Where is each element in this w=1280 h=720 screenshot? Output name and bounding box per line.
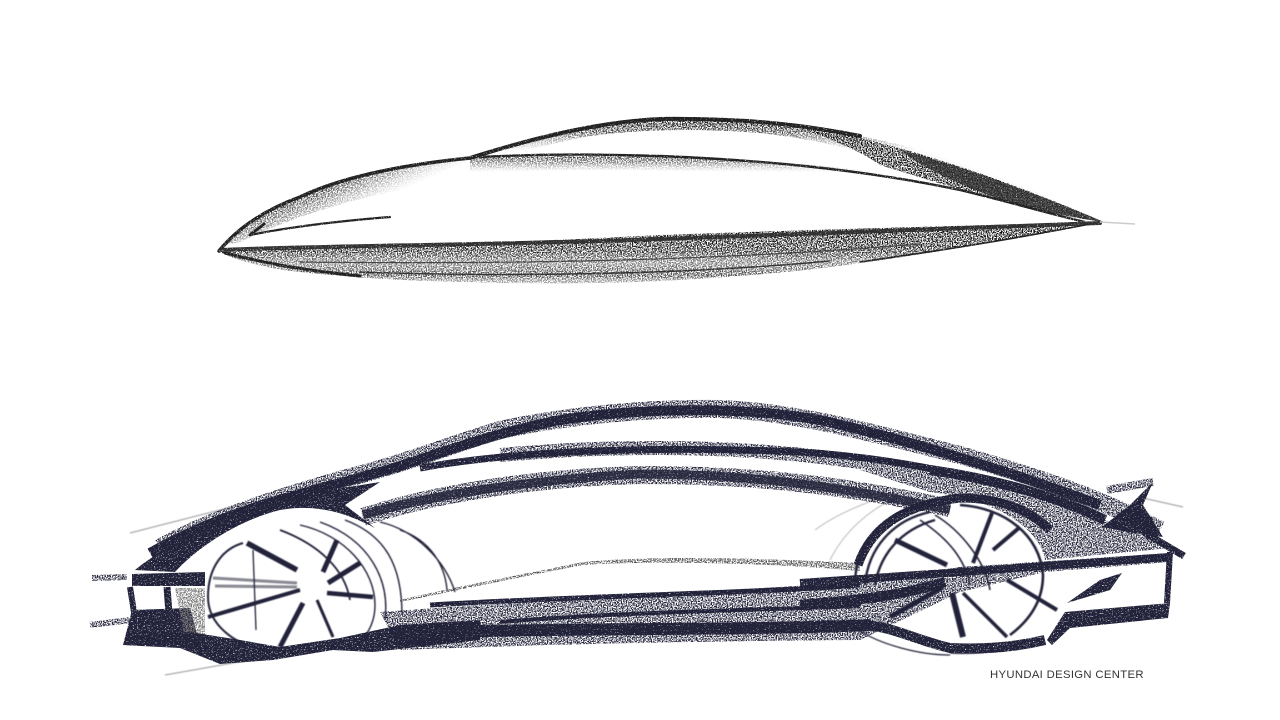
- front grille grain: [175, 588, 205, 640]
- bottom sketch: side view of car: [90, 409, 1184, 675]
- hood and fender mass: [135, 482, 380, 572]
- seed form: contour strokes: [219, 119, 1100, 276]
- sill highlight line: [400, 558, 860, 602]
- front wheel: [208, 520, 455, 650]
- spoiler: [1102, 482, 1163, 537]
- rear wedge: [1067, 573, 1122, 603]
- seed form: roof shading: [478, 117, 1104, 222]
- seed form: rear dark mass: [790, 124, 1104, 222]
- rear lower bumper: [1047, 603, 1170, 645]
- top sketch: aerodynamic seed form: [219, 117, 1135, 283]
- rear wheel: [855, 505, 1057, 655]
- seed form: shoulder shading: [225, 155, 660, 245]
- seed form: mid body line shading: [470, 156, 1080, 222]
- construction hairlines: [130, 498, 1183, 675]
- front fascia: [123, 587, 200, 645]
- roof and window bundle: [90, 409, 1170, 625]
- rear fender arc: [858, 498, 1050, 565]
- seed form: tail hairline: [1100, 222, 1135, 224]
- underbody and rocker mass: [380, 553, 1170, 650]
- seed form: lower hull shading: [220, 222, 1104, 283]
- credit text: HYUNDAI DESIGN CENTER: [990, 669, 1144, 681]
